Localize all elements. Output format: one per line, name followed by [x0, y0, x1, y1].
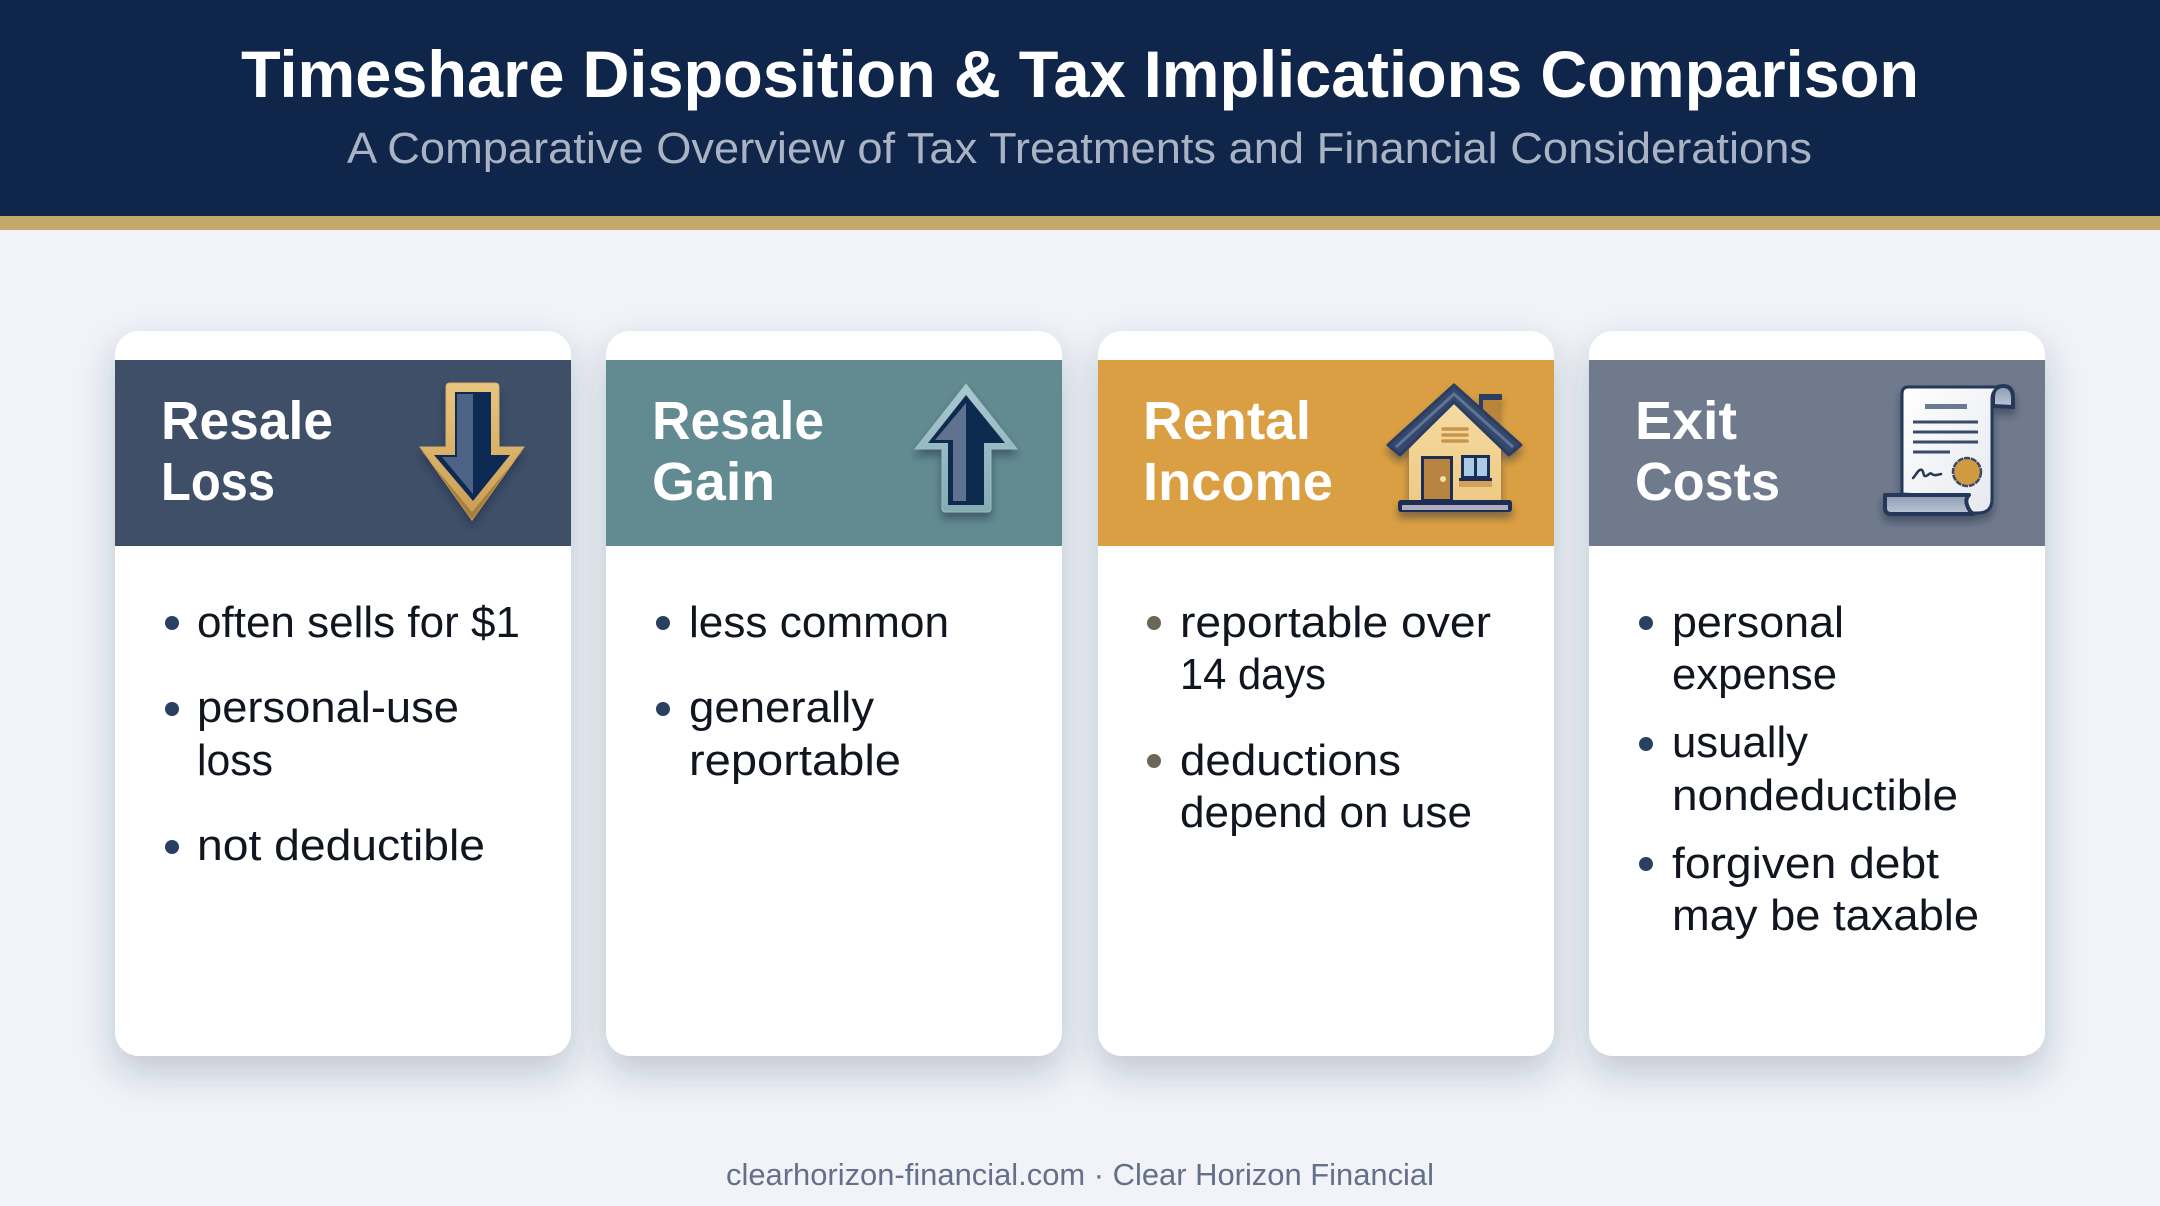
title: Timeshare Disposition & Tax Implications Comparison	[241, 37, 1919, 111]
heading: Rental Income: Rental	[1143, 391, 1311, 451]
bullet list	[1639, 598, 1979, 940]
card background	[1098, 331, 1554, 1056]
bullet: reportable over 14 days	[1147, 598, 1491, 699]
bullet: usually nondeductible: nondeductible	[1672, 771, 1958, 820]
bullet: often sells for $1: often sells for $1	[197, 598, 520, 647]
heading: Resale Gain: Resale	[652, 391, 824, 451]
panel: exit costs	[1589, 331, 2045, 1056]
bullet: deductions depend on use	[1147, 736, 1472, 837]
icon: up arrow	[915, 384, 1017, 512]
bullet: less common: less common	[689, 598, 949, 647]
bullet: reportable over 14 days: reportable over	[1180, 598, 1491, 647]
subtitle: A Comparative Overview of Tax Treatments and Financial Considerations	[347, 124, 1812, 173]
bullet list	[656, 598, 949, 785]
card header band	[606, 360, 1062, 546]
bullet: personal-use loss	[165, 683, 459, 785]
bullet: personal-use loss: loss	[197, 736, 273, 785]
card header band	[1589, 360, 2045, 546]
heading: Resale Loss	[161, 391, 333, 512]
heading: Resale Loss: Resale	[161, 391, 333, 451]
bullet list	[165, 598, 520, 870]
heading: Rental Income: Income	[1143, 452, 1333, 512]
card background	[606, 331, 1062, 1056]
heading: Rental Income	[1143, 391, 1333, 512]
heading: Resale Gain	[652, 391, 824, 512]
bullet: personal-use loss: personal-use	[197, 683, 459, 732]
icon: house	[1388, 385, 1521, 512]
header band	[0, 0, 2160, 216]
bullet: forgiven debt may be taxable: forgiven debt	[1672, 839, 1939, 888]
bullet: forgiven debt may be taxable: may be taxable	[1672, 891, 1979, 940]
card header band	[1098, 360, 1554, 546]
card background	[1589, 331, 2045, 1056]
bullet list	[1147, 598, 1491, 837]
panel: rental income	[1098, 331, 1554, 1056]
gold accent bar	[0, 216, 2160, 230]
heading: Resale Gain: Gain	[652, 452, 775, 512]
bullet: usually nondeductible: usually	[1672, 718, 1808, 767]
panel: resale loss	[115, 331, 571, 1056]
heading: Resale Loss: Loss	[161, 452, 275, 512]
bullet: deductions depend on use: depend on use	[1180, 788, 1472, 837]
card background	[115, 331, 571, 1056]
bullet: personal expense	[1639, 598, 1844, 699]
bullet: deductions depend on use: deductions	[1180, 736, 1401, 785]
bullet: generally reportable	[656, 683, 901, 785]
icon: down arrow	[420, 383, 524, 520]
footer: clearhorizon-financial.com · Clear Horizon Financial	[726, 1157, 1434, 1192]
icon: document scroll	[1885, 386, 2013, 514]
heading: Exit Costs: Exit	[1635, 391, 1737, 451]
bullet: personal expense: personal	[1672, 598, 1844, 647]
bullet: generally reportable: generally	[689, 683, 874, 732]
card header band	[115, 360, 571, 546]
bullet: usually nondeductible	[1639, 718, 1958, 820]
heading: Exit Costs	[1635, 391, 1780, 512]
bullet: generally reportable: reportable	[689, 736, 901, 785]
heading: Exit Costs: Costs	[1635, 452, 1780, 512]
bullet: reportable over 14 days: 14 days	[1180, 650, 1326, 699]
bullet: personal expense: expense	[1672, 650, 1837, 699]
bullet: forgiven debt may be taxable	[1639, 839, 1979, 940]
bullet: not deductible: not deductible	[197, 821, 485, 870]
panel: resale gain	[606, 331, 1062, 1056]
